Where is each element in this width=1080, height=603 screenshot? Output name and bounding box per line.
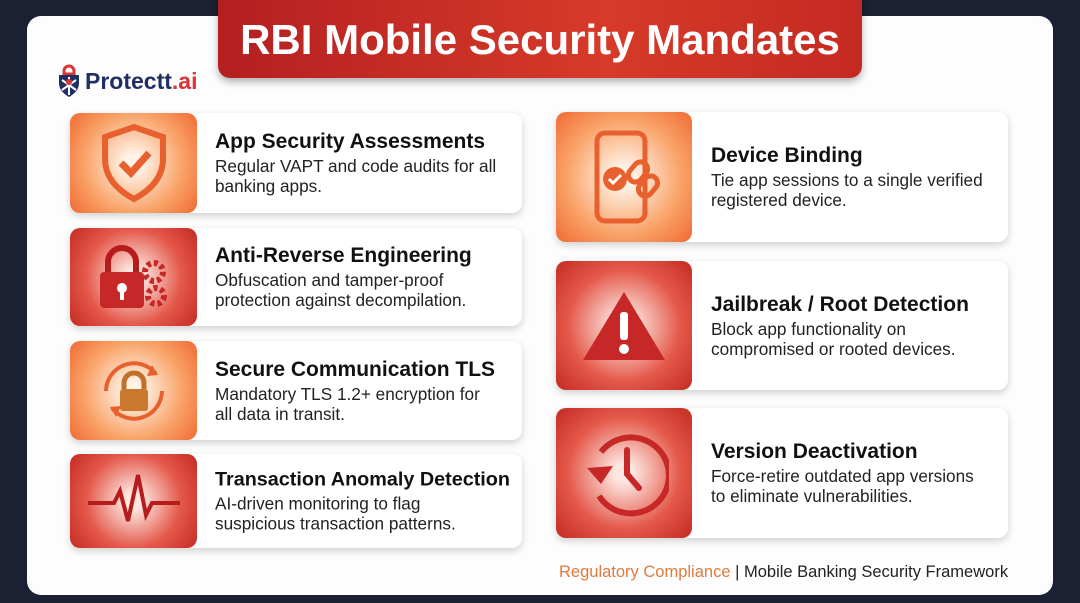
card: Transaction Anomaly Detection [70, 454, 522, 548]
icon: history clock [556, 408, 692, 538]
text: App Security Assessments [215, 130, 485, 153]
text: banking apps. [215, 176, 322, 196]
logo: Protectt.ai [85, 68, 197, 94]
card: Anti-Reverse Engineering [70, 228, 522, 326]
text: Secure Communication TLS [215, 358, 495, 380]
text [215, 244, 472, 310]
text: Regular VAPT and code audits for all [215, 156, 496, 176]
icon: warning [556, 261, 692, 390]
text: Obfuscation and tamper-proof [215, 270, 443, 290]
text [215, 358, 495, 424]
text: Transaction Anomaly Detection [215, 468, 510, 490]
text: to eliminate vulnerabilities. [711, 486, 913, 506]
text: compromised or rooted devices. [711, 338, 956, 358]
icon: lock gears [70, 228, 197, 326]
text: protection against decompilation. [215, 290, 466, 310]
text: registered device. [711, 190, 847, 210]
text: Tie app sessions to a single verified [711, 170, 983, 190]
title [218, 0, 862, 78]
text: all data in transit. [215, 404, 345, 424]
text: suspicious transaction patterns. [215, 514, 456, 534]
text [711, 292, 969, 358]
icon: shield check [70, 113, 197, 213]
text [215, 130, 496, 196]
icon: phone chain [556, 112, 692, 242]
text [711, 144, 983, 210]
text: Device Binding [711, 144, 863, 167]
card: Device Binding [556, 112, 1008, 242]
logo [59, 64, 197, 97]
footer: Regulatory Compliance | Mobile Banking Security Framework [559, 563, 1008, 581]
text: Jailbreak / Root Detection [711, 292, 969, 316]
text: Version Deactivation [711, 440, 918, 463]
text: Force-retire outdated app versions [711, 466, 974, 486]
card: Jailbreak / Root Detection [556, 261, 1008, 390]
title: RBI Mobile Security Mandates [240, 16, 840, 63]
card: App Security Assessments [70, 113, 522, 213]
card: Version Deactivation [556, 408, 1008, 538]
card: Secure Communication TLS [70, 341, 522, 440]
icon: lock cycle [70, 341, 197, 440]
text [215, 468, 510, 534]
text: Anti-Reverse Engineering [215, 244, 472, 267]
text: AI-driven monitoring to flag [215, 494, 420, 514]
text [711, 440, 974, 506]
icon: pulse [70, 454, 197, 548]
text: Block app functionality on [711, 318, 906, 338]
text: Mandatory TLS 1.2+ encryption for [215, 384, 480, 404]
